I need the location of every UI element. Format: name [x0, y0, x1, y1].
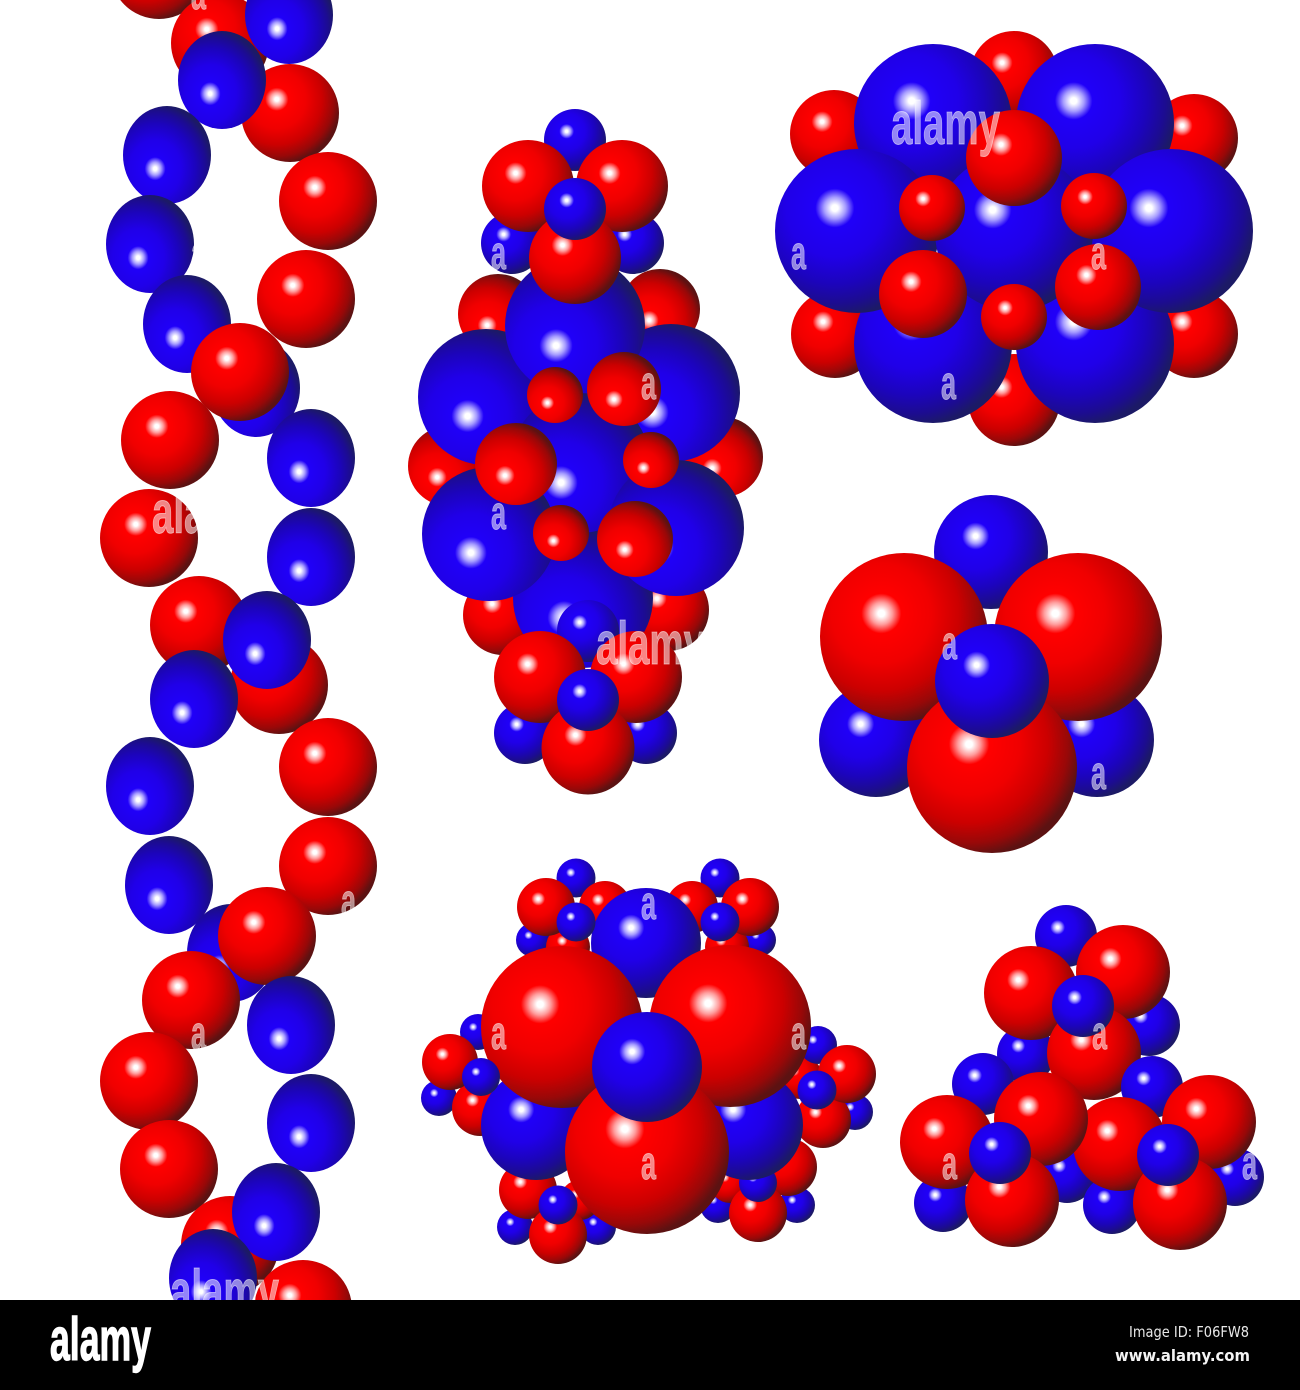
- footer logo: alamy: [50, 1306, 151, 1373]
- watermarks: alamy: [170, 1258, 279, 1325]
- watermarks: a: [1242, 1136, 1257, 1189]
- watermarks: a: [1091, 746, 1106, 799]
- watermarks: alamy: [891, 90, 1000, 157]
- bottom right cluster: [900, 905, 1264, 1250]
- watermarks: a: [791, 226, 806, 279]
- watermarks: a: [1092, 1006, 1107, 1059]
- watermarks: alamy: [152, 479, 261, 546]
- chain of spheres on the left: [100, 0, 377, 1358]
- watermarks: a: [791, 1006, 806, 1059]
- watermarks: a: [641, 356, 656, 409]
- watermarks: a: [641, 1136, 656, 1189]
- central elongated cluster: [408, 109, 763, 794]
- watermarks: a: [641, 876, 656, 929]
- watermarks: a: [491, 486, 506, 539]
- watermarks: a: [941, 356, 956, 409]
- watermarks: a: [491, 226, 506, 279]
- watermarks: a: [491, 1006, 506, 1059]
- footer bar: [0, 1300, 1300, 1390]
- watermarks: a: [942, 1136, 957, 1189]
- watermarks: a: [942, 616, 957, 669]
- bottom centre cluster: [421, 858, 876, 1264]
- watermarks: a: [191, 1006, 206, 1059]
- website: www.alamy.com: [1115, 1346, 1250, 1365]
- watermarks: a: [341, 874, 356, 927]
- image id: Image ID: F06FW8: [1129, 1323, 1249, 1341]
- middle right cluster: [819, 495, 1162, 853]
- watermarks: alamy: [596, 610, 705, 677]
- watermarks: a: [191, 226, 206, 279]
- watermarks: a: [1091, 226, 1106, 279]
- top right cluster: [775, 31, 1253, 446]
